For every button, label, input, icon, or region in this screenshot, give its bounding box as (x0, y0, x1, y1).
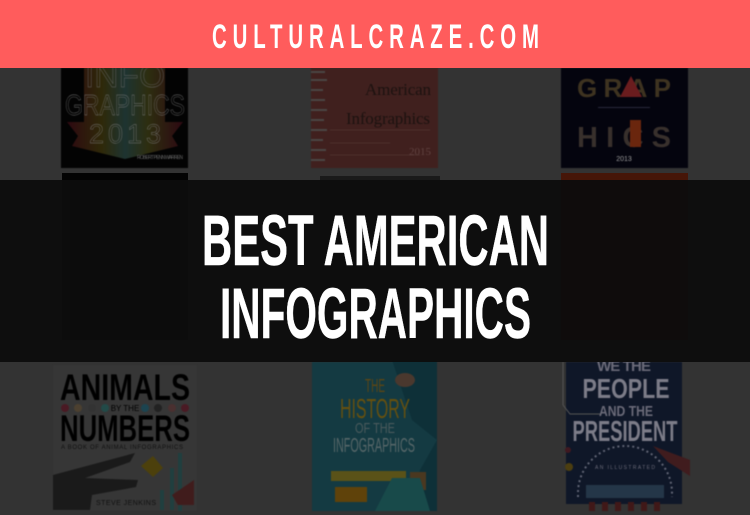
book cover: History of Infographics (312, 360, 437, 511)
top banner (0, 0, 750, 68)
title band (0, 180, 750, 362)
book cover: Graphics 2013: 2013 (616, 156, 632, 163)
title: INFOGRAPHICS (220, 275, 531, 354)
book cover: Animals by the Numbers: A BOOK OF ANIMAL INFOGRAPHICS (61, 445, 183, 451)
book cover: second row middle (320, 176, 440, 340)
book cover: Animals by the Numbers (53, 365, 197, 511)
book cover: We the People and the President: PEOPLE (582, 373, 670, 404)
book cover: History of Infographics: INFOGRAPHICS (333, 435, 415, 457)
book cover: History of Infographics: OF THE (355, 420, 395, 437)
book cover: Animals by the Numbers: STEVE JENKINS (96, 500, 156, 507)
book cover: American Infographics: Infographics (346, 109, 430, 128)
book cover: We the People and the President: AND THE (599, 403, 653, 420)
book cover: We the People and the President: WE THE (597, 358, 651, 375)
book cover: Info Graphics 2013: GRAPHICS (65, 90, 185, 122)
book cover: Animals by the Numbers: NUMBERS (60, 408, 190, 449)
book cover: History of Infographics: HISTORY (340, 393, 410, 424)
book cover: We the People and the President: PRESIDENT (572, 416, 678, 448)
book cover: Info Graphics 2013: INFO (85, 58, 165, 94)
book cover: American Infographics: 2015 (409, 146, 432, 158)
book cover: American Infographics (311, 68, 438, 168)
book cover: Graphics 2013: GRAP (577, 73, 671, 103)
book cover: Info Graphics 2013: ROBERT PENN WARREN (137, 155, 183, 161)
book cover: History of Infographics: THE (365, 376, 385, 396)
book cover: Animals by the Numbers: ANIMALS (60, 367, 190, 408)
book cover: Graphics 2013: HICS (577, 122, 671, 154)
book cover: We the People and the President (563, 358, 690, 511)
book cover: American Infographics: American (365, 80, 432, 99)
book cover: Info Graphics 2013: 2013 (89, 119, 161, 149)
title (202, 202, 549, 354)
site name: CULTURALCRAZE.COM (212, 18, 539, 55)
book cover: Animals by the Numbers: BY THE (111, 404, 139, 413)
book cover: second row left (62, 173, 188, 340)
book cover: second row right (561, 173, 688, 340)
book cover: Info Graphics 2013 (61, 58, 188, 168)
book cover: Graphics 2013 (561, 68, 688, 168)
book cover: We the People and the President: AN ILLUSTRATED (595, 465, 655, 471)
